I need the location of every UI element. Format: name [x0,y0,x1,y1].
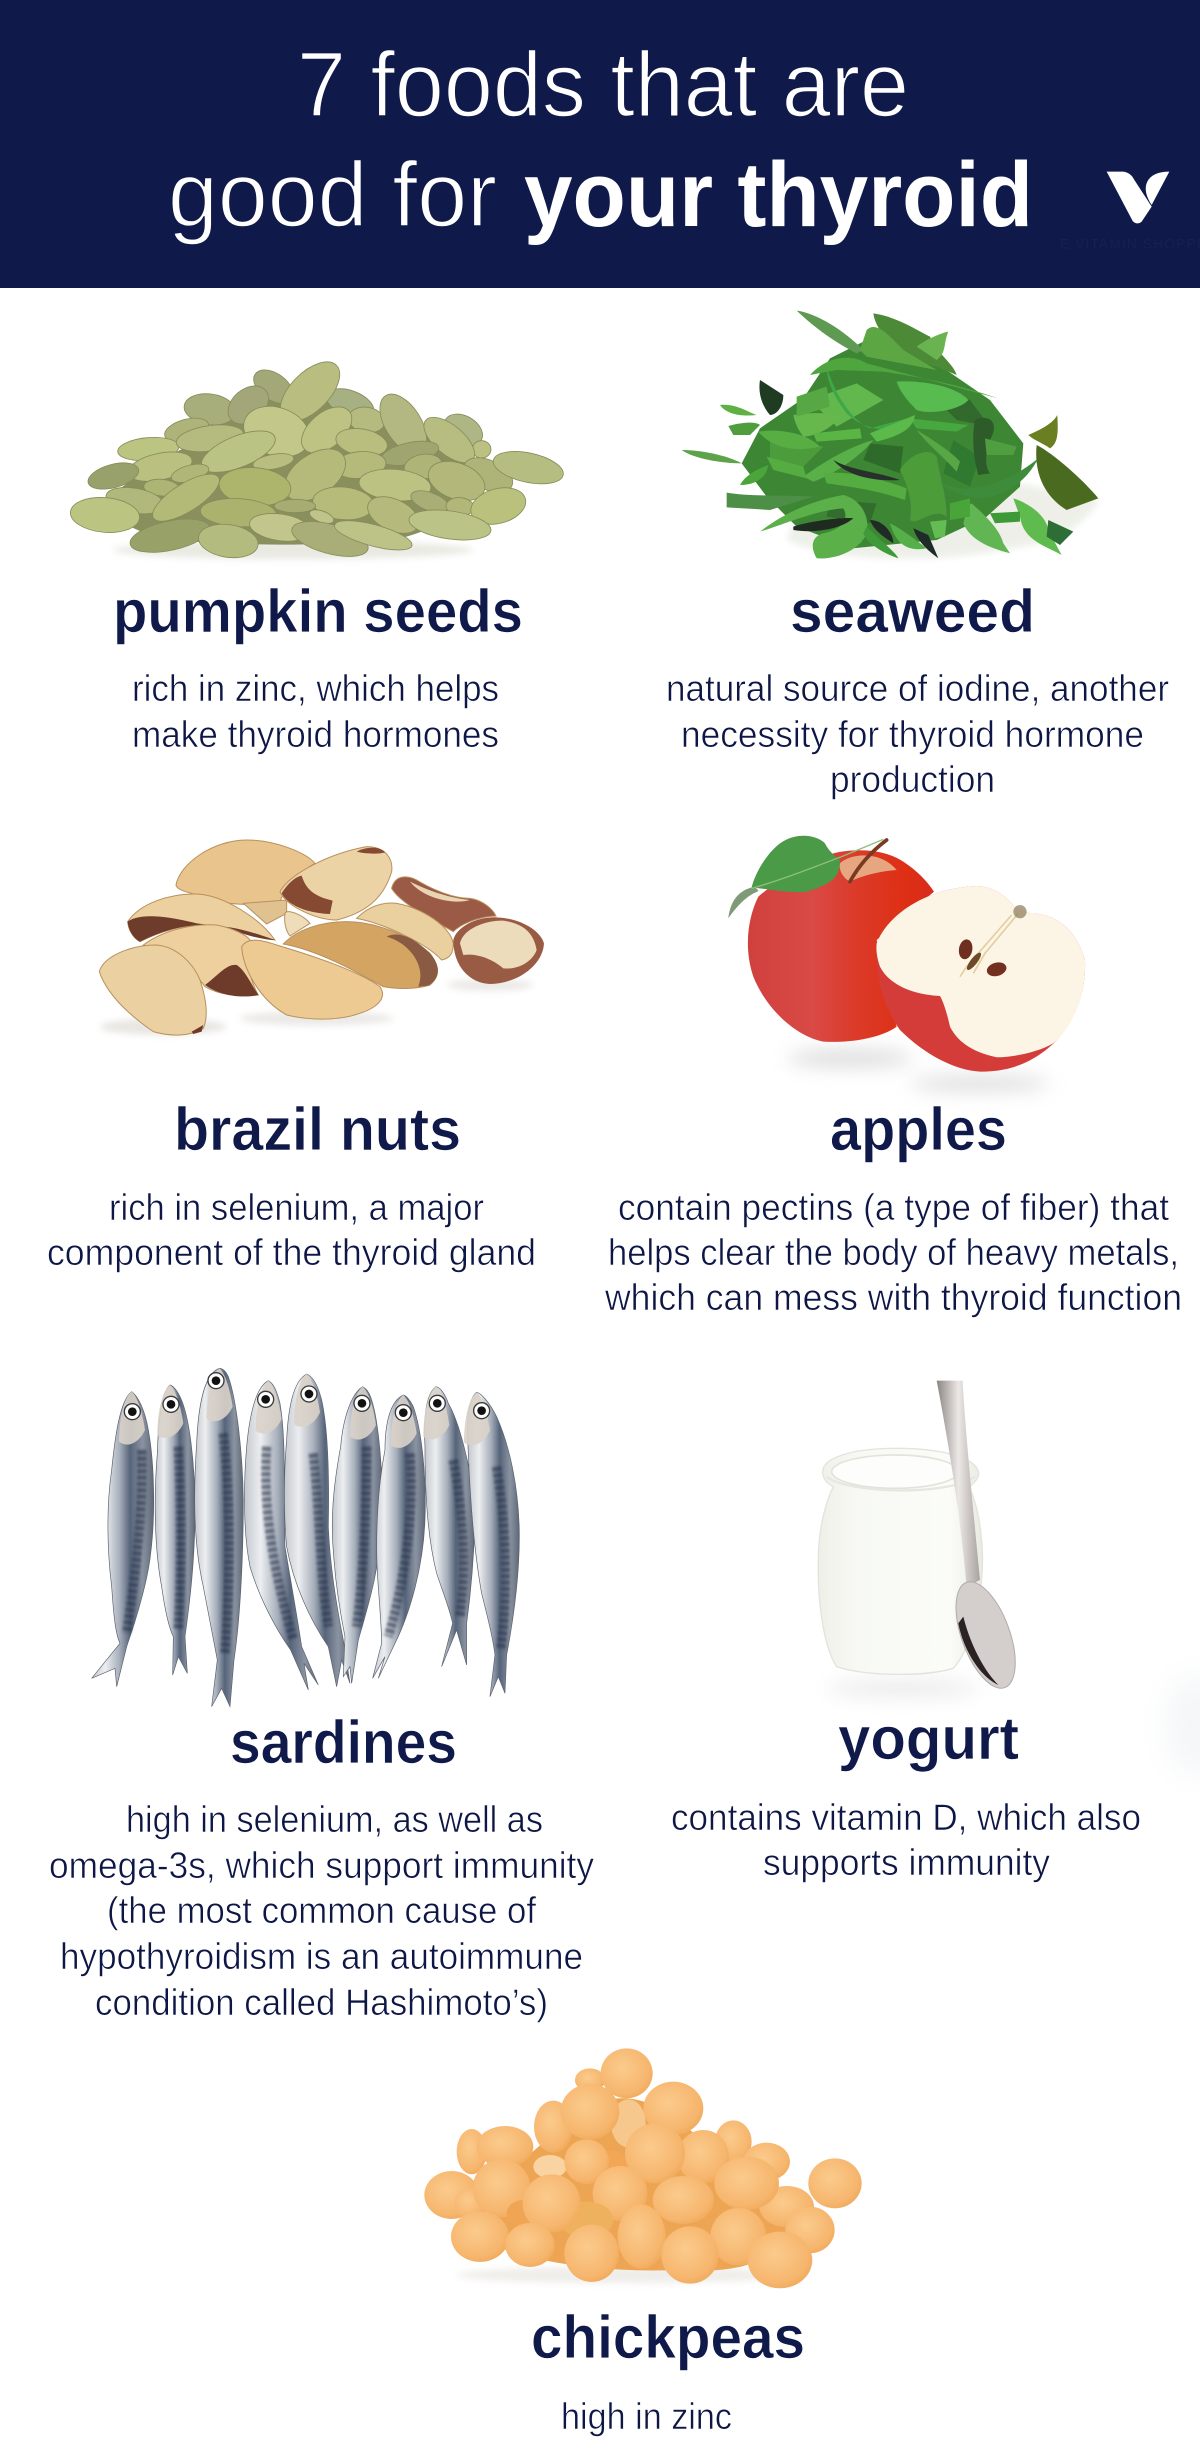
description: sardines: condition called Hashimoto’s) [95,1982,548,2023]
whole apple [748,850,934,1042]
half apple [876,886,1085,1072]
panel: brazil nuts [47,840,544,1273]
image: brazil nuts [99,840,544,1035]
jar [818,1448,982,1674]
description: seaweed: necessity for thyroid hormone [681,714,1144,755]
description: seaweed [666,668,1169,800]
heading: chickpeas: chickpeas [531,2304,805,2371]
description: sardines [49,1799,594,2023]
description: apples: contain pectins (a type of fiber) that [618,1187,1170,1228]
title [168,34,1033,246]
panel: yogurt [671,1381,1200,1883]
header banner [0,0,1200,288]
heading: apples: apples [830,1096,1007,1163]
image: apples [728,836,1085,1091]
heading: seaweed: seaweed [790,578,1035,645]
panel: chickpeas [424,2048,862,2437]
heading: brazil nuts: brazil nuts [174,1096,461,1163]
description: brazil nuts: rich in selenium, a major [109,1187,484,1228]
leaf [728,887,760,918]
title: your thyroid [524,144,1033,246]
description: chickpeas: high in zinc [561,2396,732,2437]
title: 7 foods that are [297,34,909,136]
description: apples: which can mess with thyroid function [604,1277,1182,1318]
spoon [937,1381,980,1587]
icon: brand logo [1060,172,1200,251]
description: brazil nuts [47,1187,536,1273]
description: sardines: (the most common cause of [107,1890,537,1931]
description: yogurt: supports immunity [763,1842,1050,1883]
image: chickpeas [424,2048,862,2288]
panel: seaweed [666,311,1169,800]
image: pumpkin seeds [69,352,566,563]
panel: sardines [49,1368,594,2023]
description: sardines: hypothyroidism is an autoimmune [60,1936,583,1977]
description: pumpkin seeds [132,668,499,755]
description: sardines: high in selenium, as well as [126,1799,543,1840]
description: pumpkin seeds: rich in zinc, which helps [132,668,499,709]
description: yogurt: contains vitamin D, which also [671,1797,1141,1838]
description: yogurt [671,1797,1141,1883]
heading: sardines: sardines [230,1709,457,1776]
title: good for [168,144,497,246]
description: seaweed: natural source of iodine, another [666,668,1169,709]
soft shadow at right edge [1165,1675,1200,1775]
panel: apples [604,836,1182,1318]
image: yogurt [818,1381,1027,1698]
description: apples [604,1187,1182,1318]
description: seaweed: production [830,759,995,800]
panel: pumpkin seeds [69,352,566,755]
description: pumpkin seeds: make thyroid hormones [132,714,499,755]
heading: yogurt: yogurt [838,1705,1019,1772]
image: seaweed [682,311,1100,559]
description: sardines: omega-3s, which support immunity [49,1845,594,1886]
description: brazil nuts: component of the thyroid gland [47,1232,536,1273]
image: sardines [92,1368,519,1707]
heading: pumpkin seeds: pumpkin seeds [113,578,523,645]
